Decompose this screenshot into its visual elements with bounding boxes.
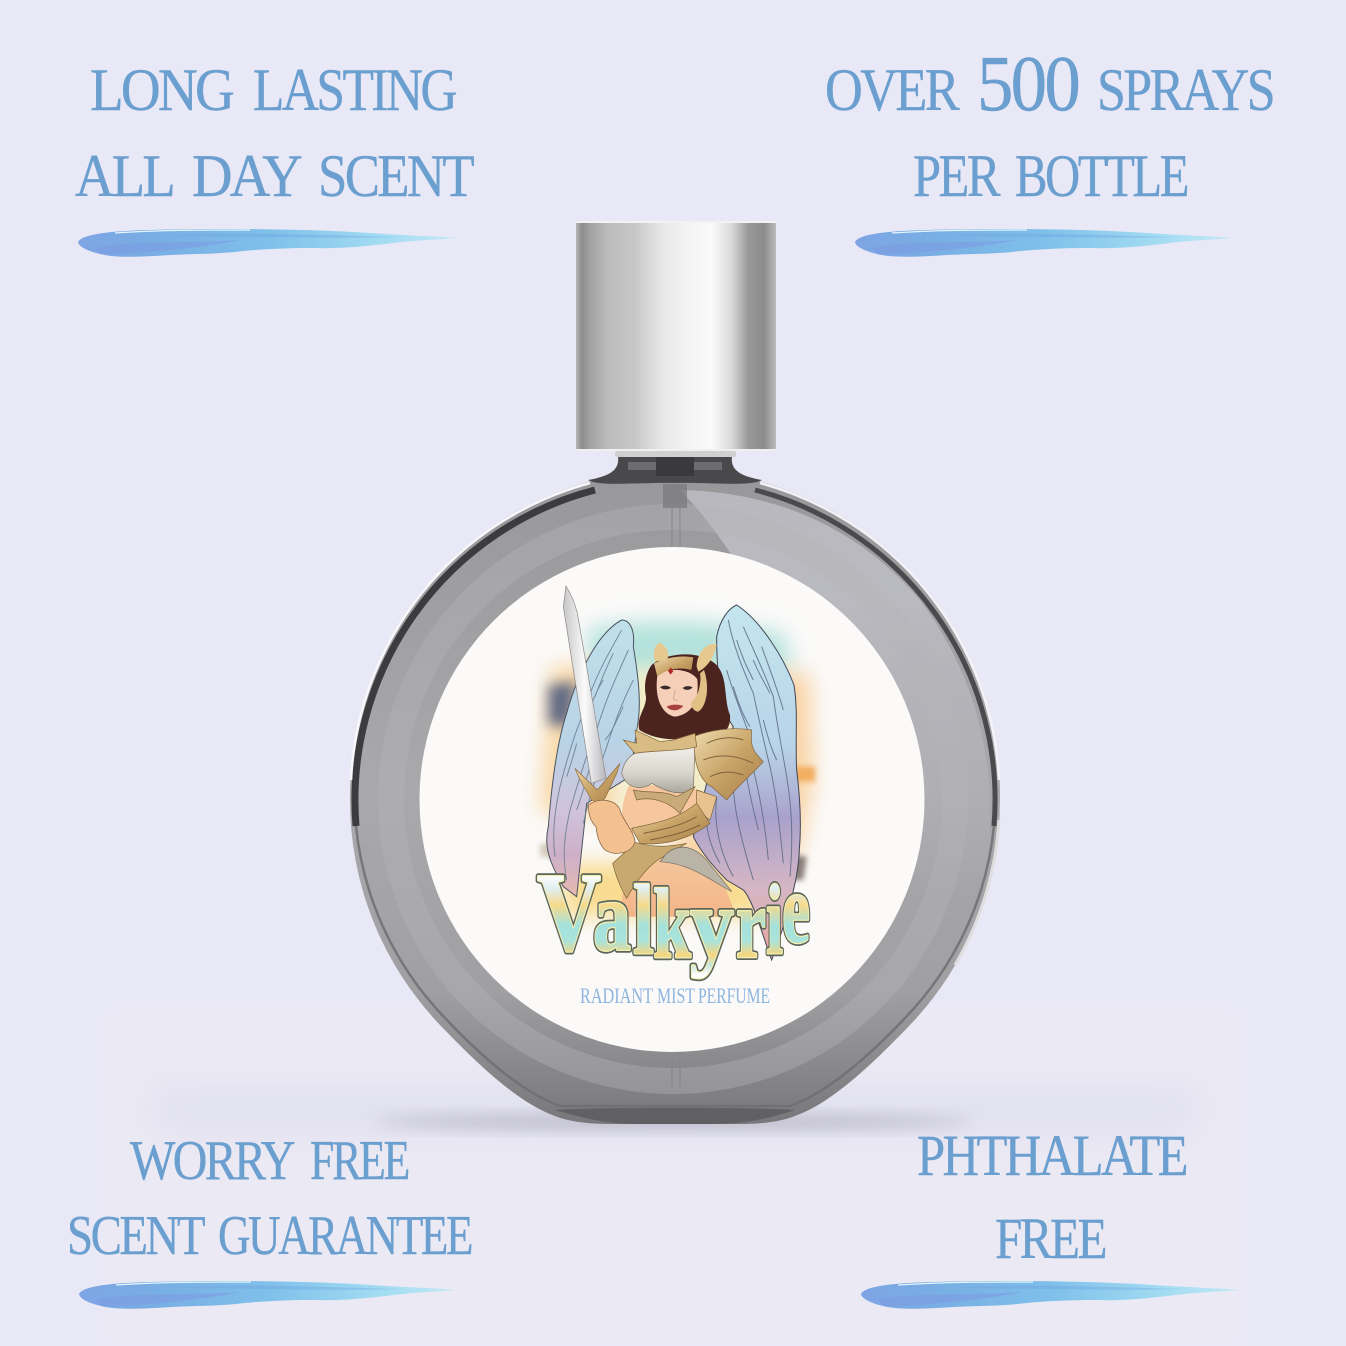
brush stroke: top right [855, 229, 1232, 257]
heading: long lasting all day scent: LONG [90, 57, 234, 123]
blurred sky backdrop [540, 622, 815, 917]
shoulder armor [693, 729, 763, 800]
heading: long lasting all day scent: DAY [192, 143, 302, 209]
heading: over 500 sprays per bottle: BOTTLE [1015, 143, 1187, 209]
logotype outline layer: y [690, 868, 734, 979]
torso skin [622, 783, 700, 833]
logotype outline layer: e [782, 853, 810, 964]
heading: phthalate free: FREE [995, 1206, 1105, 1271]
glass body [350, 456, 1000, 1124]
round label [420, 547, 924, 1052]
logotype gradient layer: k [653, 868, 691, 979]
drape [660, 847, 732, 892]
heading: over 500 sprays per bottle [825, 41, 1273, 209]
floor shadow under bottle [373, 1115, 973, 1129]
brush stroke: top left [78, 229, 458, 257]
sword blade [563, 586, 606, 783]
silver cap [576, 221, 776, 457]
logotype gradient layer: a [593, 861, 631, 972]
logotype gradient layer: y [690, 868, 734, 979]
face features [660, 686, 693, 710]
logotype outline layer: k [653, 868, 691, 979]
lower rim band [356, 826, 994, 1106]
logotype outline layer: r [736, 868, 766, 979]
neck armor [623, 730, 697, 753]
logotype gradient layer: V [537, 851, 601, 975]
heading: long lasting all day scent: ALL [75, 143, 173, 209]
heading: worry free scent guarantee: SCENT [67, 1205, 205, 1267]
heading: over 500 sprays per bottle: OVER [825, 57, 960, 123]
logotype gradient layer: e [782, 853, 810, 964]
heading: long lasting all day scent: SCENT [318, 143, 474, 209]
gauntlet [632, 803, 710, 844]
bodice strip [633, 787, 695, 813]
label subtitle: PERFUME [698, 983, 770, 1008]
right wing [693, 605, 800, 960]
brush stroke: bottom left [79, 1281, 456, 1309]
hair [639, 654, 730, 739]
heading: worry free scent guarantee: FREE [310, 1130, 409, 1192]
heading: phthalate free [917, 1123, 1186, 1271]
label subtitle: MIST [657, 983, 695, 1008]
logotype outline layer: i [766, 864, 783, 975]
heading: over 500 sprays per bottle: 500 [977, 41, 1078, 128]
brush stroke: bottom right [861, 1281, 1240, 1309]
logotype gradient layer: l [633, 864, 654, 975]
heading: worry free scent guarantee: GUARANTEE [218, 1205, 472, 1267]
label subtitle [580, 983, 770, 1008]
lower skirt [613, 842, 687, 898]
label subtitle: RADIANT [580, 983, 653, 1008]
dip tube [663, 484, 687, 508]
lighter reflection, upper right [680, 490, 990, 900]
logotype gradient layer: i [766, 864, 783, 975]
heading: long lasting all day scent [75, 57, 474, 209]
logotype outline layer: V [537, 851, 601, 975]
heading: long lasting all day scent: LASTING [253, 57, 456, 123]
logotype gradient layer [537, 851, 810, 979]
logotype outline layer: l [633, 864, 654, 975]
white top [622, 745, 695, 793]
inner ring [391, 517, 955, 1081]
heading: worry free scent guarantee: WORRY [130, 1130, 295, 1192]
upper arm [697, 790, 717, 820]
hands on the hilt [588, 800, 635, 853]
heading: over 500 sprays per bottle: PER [913, 143, 1001, 209]
logotype gradient layer: r [736, 868, 766, 979]
heading: phthalate free: PHTHALATE [917, 1123, 1186, 1188]
perfume bottle [350, 221, 1000, 1124]
hips and thigh [620, 856, 737, 917]
background: lighter mist and floor [105, 1010, 1240, 1346]
sword guard [575, 763, 620, 803]
logotype outline layer: a [593, 861, 631, 972]
valkyrie logotype [537, 851, 810, 979]
face [657, 670, 698, 717]
pale outer highlight [351, 483, 590, 780]
dark shoulder [588, 456, 762, 484]
headpiece [654, 643, 717, 712]
label illustration: valkyrie [540, 586, 815, 960]
logotype outline layer [537, 851, 810, 979]
heading: worry free scent guarantee [67, 1130, 472, 1267]
dark upper rim [355, 490, 595, 826]
heading: over 500 sprays per bottle: SPRAYS [1097, 57, 1273, 123]
left wing [547, 620, 639, 897]
